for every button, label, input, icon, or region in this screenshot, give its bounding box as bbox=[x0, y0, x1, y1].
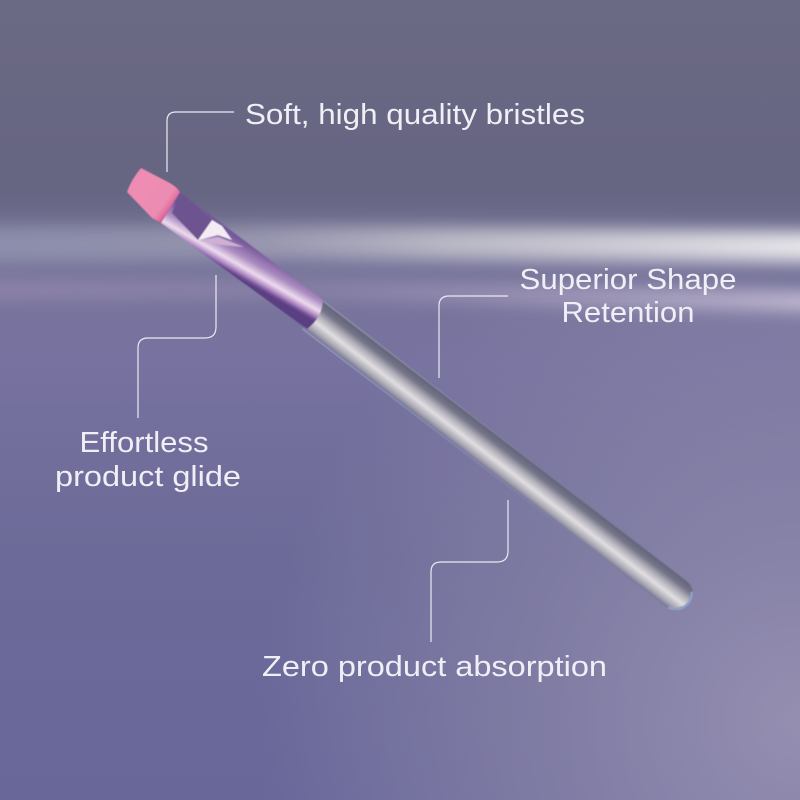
callout: bristles bbox=[167, 99, 585, 172]
connector line bbox=[167, 112, 234, 172]
label: Effortless bbox=[80, 427, 208, 459]
connector line bbox=[431, 500, 508, 642]
label: Zero product absorption bbox=[262, 651, 607, 683]
brush handle bbox=[302, 301, 700, 618]
label: Soft, high quality bristles bbox=[245, 99, 585, 131]
connector line bbox=[138, 275, 216, 418]
connector line bbox=[439, 296, 508, 378]
callout label second line: product glide bbox=[55, 461, 241, 493]
callout: zero absorption bbox=[262, 500, 607, 683]
brush bristles bbox=[127, 168, 180, 223]
label: Superior Shape bbox=[520, 264, 736, 296]
brush illustration bbox=[127, 168, 700, 618]
callout label second line: Retention bbox=[562, 297, 694, 329]
callout: shape retention bbox=[439, 264, 736, 378]
callout: product glide bbox=[80, 275, 216, 459]
ferrule crimp highlight bbox=[172, 192, 244, 247]
brush ferrule bbox=[161, 192, 323, 329]
